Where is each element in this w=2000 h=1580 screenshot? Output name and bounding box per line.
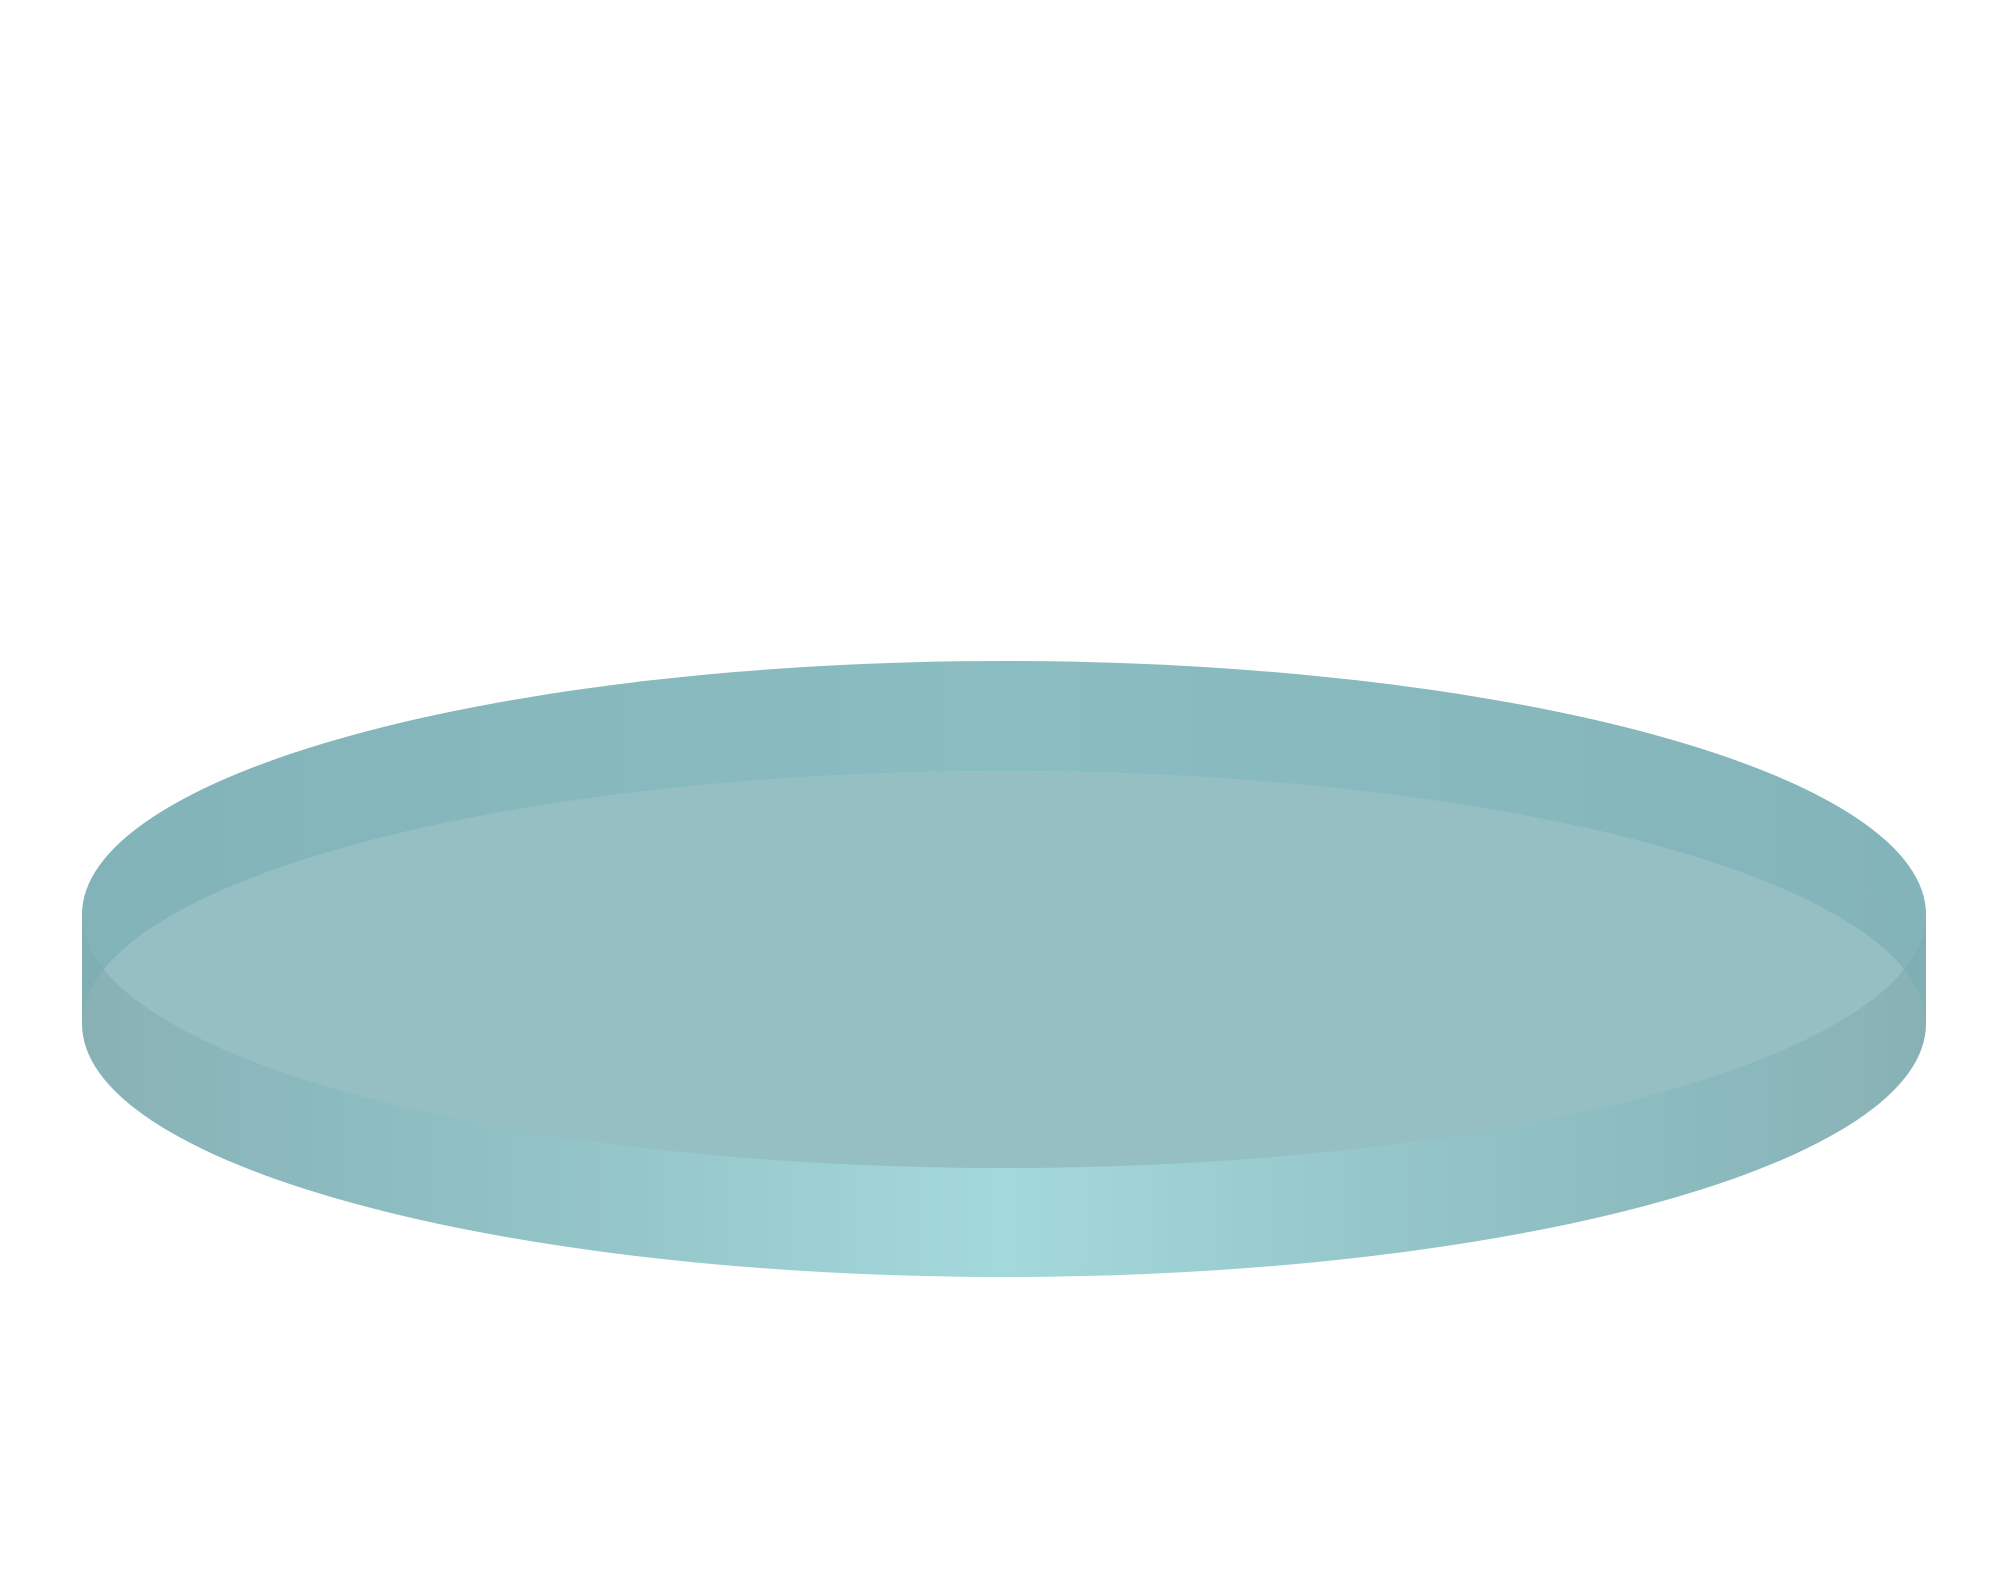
disc side strips xyxy=(82,914,1926,1025)
disc front wall xyxy=(82,771,1926,1277)
disc back surface xyxy=(82,661,1926,1168)
disc centre lens overlap xyxy=(104,771,1904,1168)
illustration: translucent teal disc xyxy=(82,661,1926,1277)
